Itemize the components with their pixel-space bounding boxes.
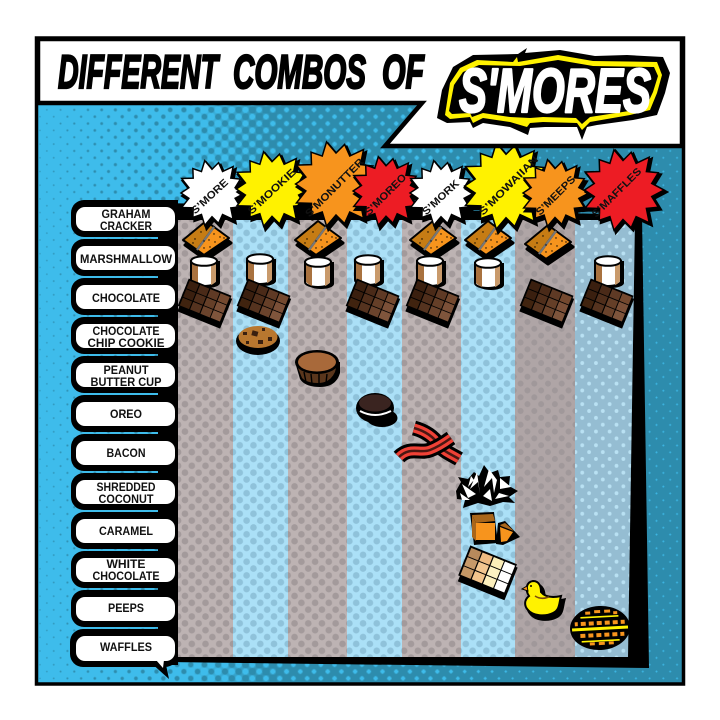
chart columns — [177, 220, 635, 657]
icon: oreo — [356, 393, 398, 427]
label: oreo — [71, 395, 178, 432]
label: chocolate — [71, 278, 178, 315]
label: chocolate chip cookie: CHIP COOKIE — [88, 338, 165, 350]
icon: bacon — [399, 428, 459, 459]
label: marshmallow — [71, 239, 178, 276]
background halftone panel — [38, 100, 682, 684]
label: peeps: PEEPS — [108, 603, 144, 615]
label: marshmallow: MARSHMALLOW — [80, 254, 172, 266]
label: chocolate: CHOCOLATE — [92, 293, 160, 305]
burst: S'MONUTTER: S’MONUTTER — [303, 156, 367, 220]
burst: S'MONUTTER — [296, 142, 381, 229]
label: shredded coconut: SHREDDED — [96, 482, 156, 494]
label: peeps — [71, 590, 178, 627]
label: shredded coconut: COCONUT — [98, 494, 154, 506]
burst: S'MOWAIIAN: S’MOWAIIAN — [477, 154, 541, 218]
burst: S'MOOKIE — [236, 152, 312, 229]
burst: S'MORK — [410, 161, 476, 228]
burst: S'MOREO — [353, 157, 423, 228]
burst: S'MORK: S’MORK — [420, 177, 462, 218]
label: peanut butter cup — [71, 356, 178, 393]
burst: S'MAFFLES: S’MAFFLES — [590, 166, 644, 220]
label: chocolate chip cookie — [71, 317, 178, 354]
icon: peep — [522, 581, 564, 619]
label: waffles with speech tail: WAFFLES — [100, 642, 152, 654]
icon: chocolate chip cookie — [236, 326, 280, 355]
icon: waffle — [569, 604, 631, 652]
label: bacon — [71, 434, 178, 471]
label: oreo: OREO — [110, 409, 142, 421]
burst: S'MOREO: S’MOREO — [363, 172, 409, 218]
burst: S'MORE — [181, 161, 247, 228]
label: chocolate chip cookie: CHOCOLATE — [92, 326, 160, 338]
icon: shredded coconut — [456, 465, 518, 508]
label: white chocolate: CHOCOLATE — [92, 571, 160, 583]
label: graham cracker — [71, 200, 178, 237]
burst: S'MEEPS — [523, 160, 591, 229]
ingredients: chocolate bars — [176, 278, 635, 329]
label: waffles with speech tail — [70, 629, 178, 679]
burst: S'MOWAIIAN — [465, 143, 552, 232]
icon: peanut butter cup — [295, 350, 340, 387]
ingredients: marshmallows — [191, 254, 624, 290]
chart frame: black panel backing — [165, 203, 649, 668]
row labels — [70, 200, 178, 679]
label: caramel — [71, 512, 178, 549]
label: bacon: BACON — [106, 448, 146, 460]
label: peanut butter cup: PEANUT — [104, 365, 148, 377]
title: DIFFERENT — [58, 45, 221, 98]
burst: S'MORE: S’MORE — [189, 177, 231, 217]
ingredients: graham crackers — [183, 221, 573, 264]
title: COMBOS — [233, 45, 366, 98]
label: graham cracker: GRAHAM — [102, 209, 150, 221]
label: caramel: CARAMEL — [99, 526, 153, 538]
icon: white chocolate bar — [456, 545, 519, 600]
burst: S'MOOKIE: S’MOOKIE — [246, 167, 298, 217]
label: peanut butter cup: BUTTER CUP — [90, 377, 162, 389]
title banner with speech tail — [38, 39, 682, 146]
burst: S'MEEPS: S’MEEPS — [534, 174, 578, 218]
label: graham cracker: CRACKER — [100, 221, 153, 233]
burst: S'MAFFLES — [584, 150, 666, 232]
label: white chocolate: WHITE — [106, 559, 146, 571]
icon: caramel cubes — [470, 512, 520, 545]
label: shredded coconut — [71, 473, 178, 510]
logo: S'MORES — [437, 48, 670, 140]
title: OF — [382, 45, 425, 98]
label: white chocolate — [71, 551, 178, 588]
